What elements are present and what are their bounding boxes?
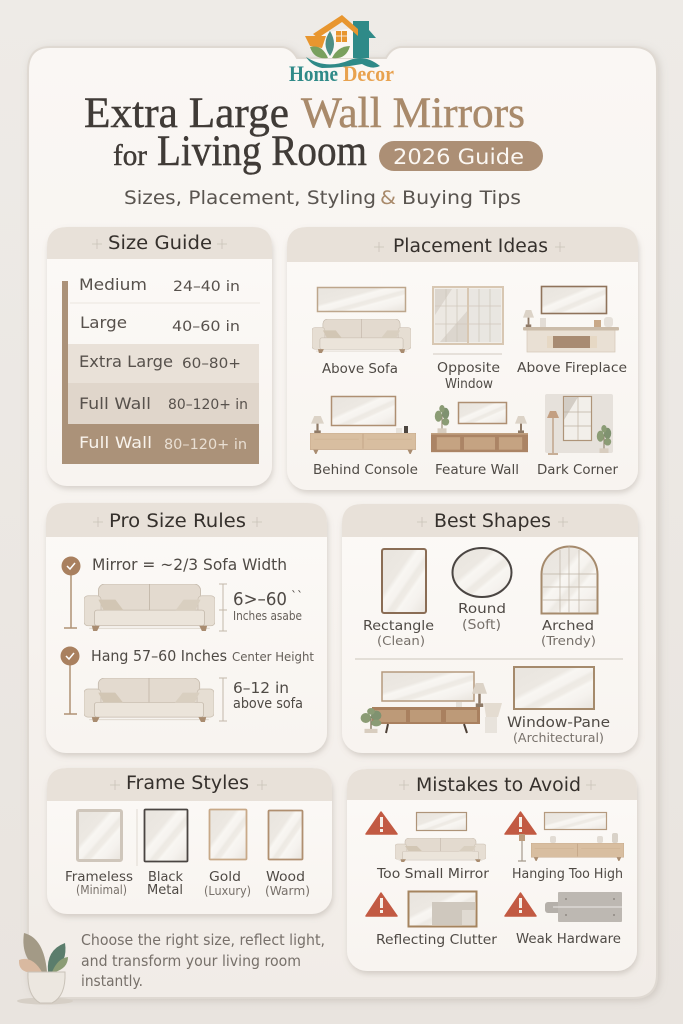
size table: 40–60 in bbox=[172, 319, 240, 335]
panel: frame styles bbox=[47, 768, 332, 914]
panel: size guide bbox=[47, 227, 272, 486]
badge: 2026 Guide bbox=[379, 141, 543, 171]
size table: Full Wall bbox=[79, 394, 151, 413]
mistake: hanging too high bbox=[505, 812, 624, 882]
mistake: too small mirror: Too Small Mirror bbox=[376, 866, 489, 882]
heading: frame styles: Frame Styles bbox=[126, 773, 249, 794]
frame: black metal: Black bbox=[148, 869, 183, 885]
frame: gold: Gold bbox=[209, 869, 241, 885]
footer message: and transform your living room bbox=[81, 952, 301, 970]
footer message bbox=[81, 931, 325, 990]
frame: wood: Wood bbox=[266, 869, 305, 885]
shape: arched bbox=[541, 546, 598, 648]
subtitle: Buying Tips bbox=[402, 187, 521, 209]
shape: arched: (Trendy) bbox=[541, 634, 596, 648]
frame: black metal: Metal bbox=[147, 882, 183, 898]
icon: house and leaves bbox=[305, 15, 380, 68]
panel: placement ideas bbox=[287, 227, 638, 490]
logo wordmark: Decor bbox=[343, 61, 394, 86]
shape: round bbox=[452, 548, 512, 633]
panel: best shapes bbox=[342, 504, 638, 753]
heading: pro size rules: Pro Size Rules bbox=[109, 511, 246, 532]
subtitle: Sizes, Placement, Styling bbox=[124, 187, 376, 209]
item: dark corner bbox=[537, 394, 618, 478]
heading: placement ideas: Placement Ideas bbox=[393, 236, 548, 257]
shape: window-pane: (Architectural) bbox=[513, 731, 604, 745]
item: opposite window: Opposite bbox=[437, 360, 500, 376]
logo wordmark: Home bbox=[289, 61, 338, 86]
heading: size guide: Size Guide bbox=[108, 233, 212, 254]
subtitle: & bbox=[380, 187, 396, 209]
heading: best shapes: Best Shapes bbox=[434, 511, 551, 532]
item: behind console: Behind Console bbox=[313, 462, 418, 478]
panel: mistakes to avoid bbox=[347, 769, 637, 971]
frame: wood: (Warm) bbox=[265, 884, 310, 898]
rule 2: hanging height: 6–12 in bbox=[233, 679, 289, 697]
size table: Medium bbox=[79, 275, 147, 294]
rule 1: mirror width: Inches asabe bbox=[233, 609, 302, 623]
shape: window-pane: Window-Pane bbox=[507, 715, 610, 731]
frame: frameless: Frameless bbox=[65, 869, 133, 885]
item: opposite window: Window bbox=[445, 376, 493, 392]
logo: Home Decor bbox=[289, 15, 394, 86]
mistake: reflecting clutter: Reflecting Clutter bbox=[376, 932, 497, 948]
size table: 80–120+ in bbox=[164, 437, 247, 453]
mistake: reflecting clutter bbox=[366, 892, 497, 948]
title: Wall Mirrors bbox=[301, 90, 525, 137]
item: dark corner: Dark Corner bbox=[537, 462, 618, 478]
rule 2: hanging height: Hang 57–60 Inches bbox=[91, 647, 227, 665]
item: above sofa bbox=[312, 288, 411, 377]
rule 2: hanging height: Center Height bbox=[232, 649, 314, 664]
shape: window-pane bbox=[507, 667, 610, 745]
title: for bbox=[113, 139, 147, 172]
item: above fireplace bbox=[517, 286, 627, 376]
scene: console with wide mirror bbox=[361, 672, 502, 733]
heading: mistakes to avoid: Mistakes to Avoid bbox=[416, 775, 581, 796]
icon: potted plant bbox=[17, 933, 73, 1004]
shape: round: Round bbox=[458, 601, 506, 617]
item: above fireplace: Above Fireplace bbox=[517, 360, 627, 376]
frame: black metal bbox=[144, 810, 188, 898]
item: feature wall bbox=[431, 402, 528, 478]
rule 1: mirror width bbox=[62, 555, 303, 631]
frame: gold bbox=[204, 810, 251, 898]
rule 1: mirror width: 6>–60 bbox=[233, 589, 287, 610]
frame: wood bbox=[265, 810, 310, 898]
rule 2: hanging height: above sofa bbox=[233, 696, 303, 712]
mistake: too small mirror bbox=[366, 812, 489, 882]
frame: frameless: (Minimal) bbox=[76, 883, 127, 897]
rule 2: hanging height bbox=[60, 646, 314, 722]
mistake: weak hardware: Weak Hardware bbox=[516, 931, 621, 947]
frame: gold: (Luxury) bbox=[204, 884, 251, 898]
shape: round: (Soft) bbox=[462, 618, 501, 633]
rule 1: mirror width: `` bbox=[291, 589, 303, 603]
size table: Full Wall bbox=[79, 433, 152, 452]
panel: pro size rules bbox=[46, 503, 327, 753]
item: feature wall: Feature Wall bbox=[435, 462, 519, 478]
shape: rectangle: (Clean) bbox=[377, 634, 425, 648]
title bbox=[84, 90, 525, 175]
size table: 60–80+ bbox=[182, 356, 241, 372]
shape: arched: Arched bbox=[542, 618, 594, 634]
footer message: Choose the right size, reflect light, bbox=[81, 931, 325, 949]
size table: 80–120+ in bbox=[168, 397, 248, 413]
title: Living Room bbox=[157, 128, 367, 175]
size table: Large bbox=[80, 313, 127, 332]
size table: 24–40 in bbox=[173, 279, 240, 295]
mistake: hanging too high: Hanging Too High bbox=[512, 866, 623, 882]
badge: 2026 Guide: 2026 Guide bbox=[393, 145, 524, 169]
rule 1: mirror width: Mirror = ~2/3 Sofa Width bbox=[92, 555, 287, 574]
size table bbox=[62, 275, 260, 464]
footer message: instantly. bbox=[81, 972, 143, 990]
title: Extra Large bbox=[84, 90, 289, 137]
mistake: weak hardware bbox=[505, 892, 622, 947]
size table: Extra Large bbox=[79, 352, 173, 371]
item: above sofa: Above Sofa bbox=[322, 361, 398, 377]
logo wordmark bbox=[289, 61, 394, 86]
item: behind console bbox=[310, 396, 418, 478]
frame: frameless bbox=[65, 810, 133, 897]
subtitle bbox=[124, 187, 521, 209]
item: opposite window bbox=[433, 287, 503, 392]
shape: rectangle bbox=[363, 549, 434, 648]
shape: rectangle: Rectangle bbox=[363, 618, 434, 634]
